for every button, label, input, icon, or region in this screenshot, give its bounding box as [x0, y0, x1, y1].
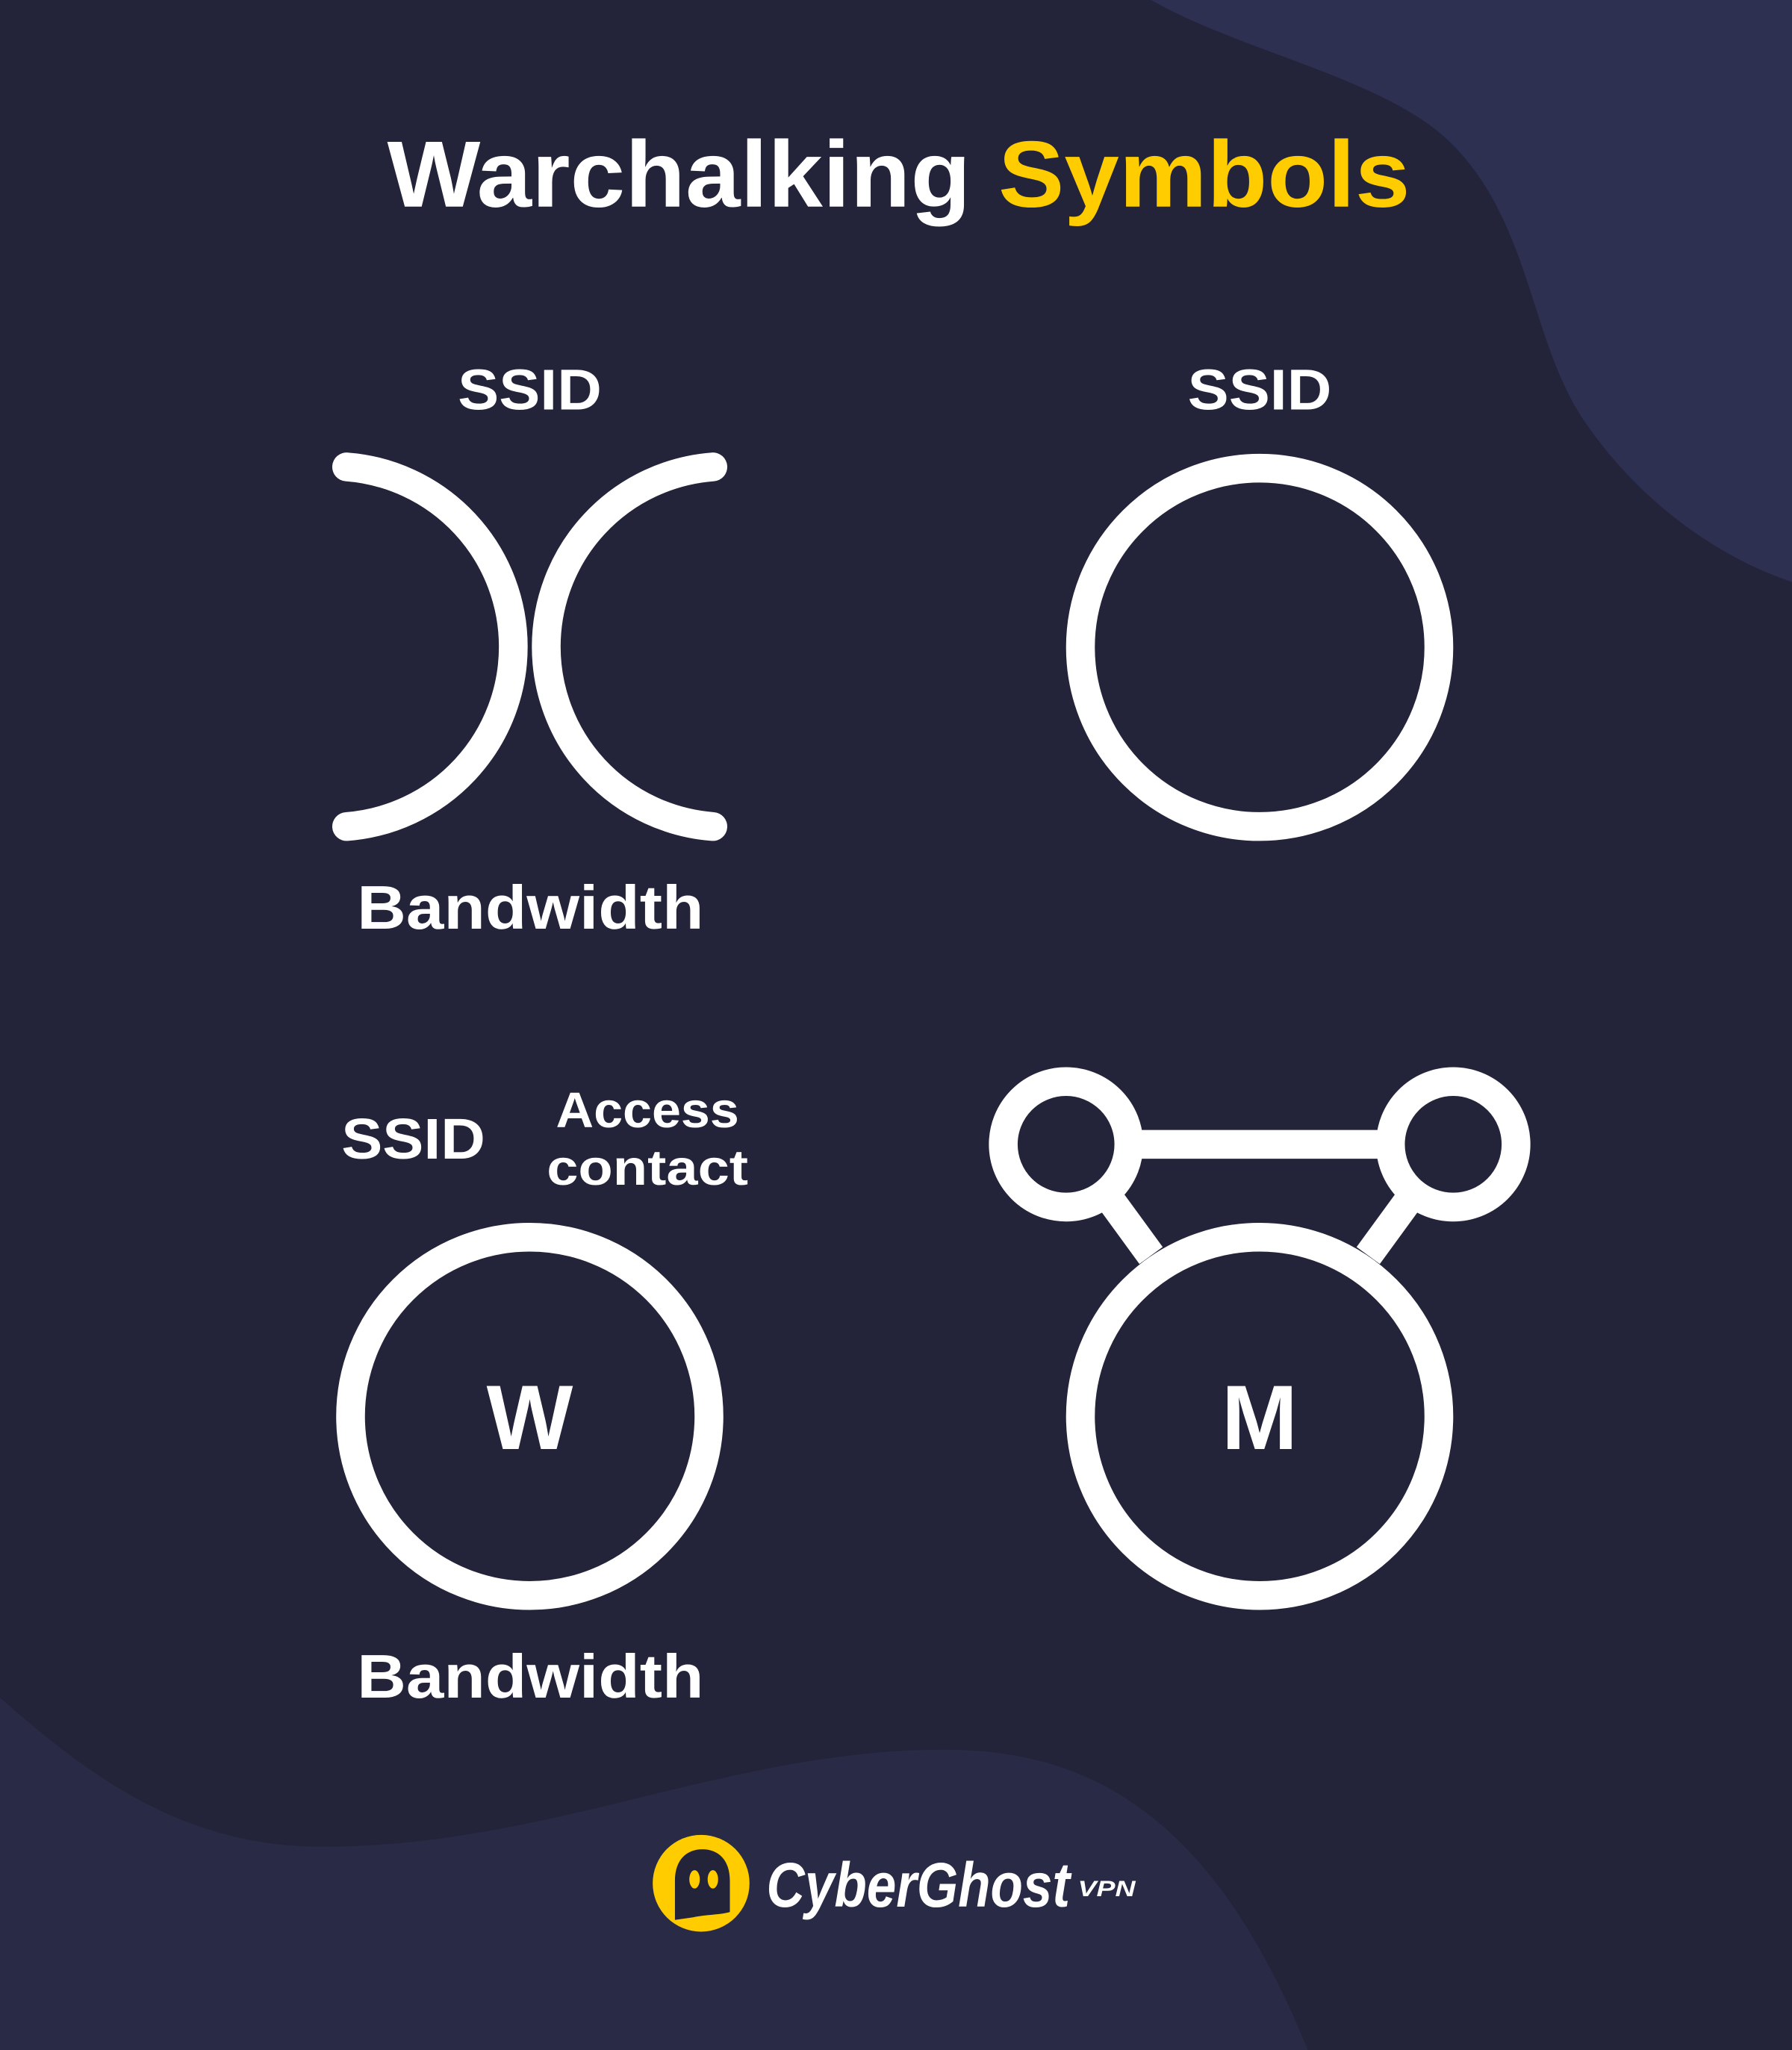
- logo: VPN: [1078, 1877, 1136, 1901]
- symbol: closed node: [1080, 468, 1439, 826]
- label: ssid 3: SSID: [341, 1107, 485, 1171]
- label: access contact: Access: [556, 1083, 739, 1138]
- symbol: mesh node: [1004, 1082, 1516, 1595]
- symbol: WEP node: [350, 1237, 709, 1595]
- label: bandwidth 1: Bandwidth: [357, 873, 703, 942]
- logo: CyberGhost: [767, 1850, 1072, 1920]
- label: ssid 1: SSID: [458, 358, 602, 422]
- label: access contact: [547, 1083, 748, 1196]
- symbol: mesh node: M: [1222, 1366, 1298, 1468]
- title: Warchalking Symbols: [388, 122, 1410, 227]
- symbol: WEP node: W: [487, 1366, 573, 1468]
- label: bandwidth 2: Bandwidth: [357, 1642, 703, 1711]
- logo: [653, 1835, 1136, 1931]
- symbol: open node: [346, 467, 713, 826]
- label: ssid 2: SSID: [1188, 358, 1331, 422]
- label: access contact: contact: [547, 1141, 748, 1196]
